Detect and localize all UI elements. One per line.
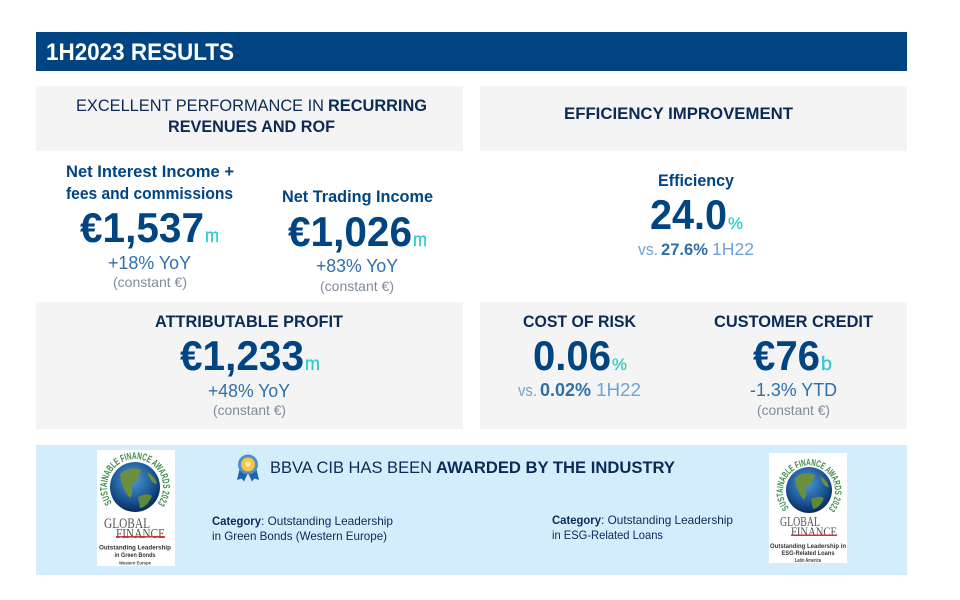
metric: efficiency: 1H22 [712,239,754,259]
award badge: esg-related loans: Outstanding Leadership in [770,543,846,550]
metric: customer credit: (constant €) [757,402,830,418]
panel: efficiency heading: EFFICIENCY IMPROVEMENT [564,104,794,123]
category: esg-related loans [552,513,733,542]
panel: attributable profit: +48% YoY [208,381,290,401]
metric: efficiency: vs. [638,240,658,259]
award badge: green bonds: in Green Bonds [114,552,156,559]
panel: attributable profit: €1,233 [180,332,304,379]
metric: customer credit: €76 [753,332,820,379]
title bar: 1H2023 RESULTS [46,39,234,66]
metric: net interest income: +18% YoY [108,253,191,273]
metric: cost of risk: 1H22 [596,379,641,400]
awards heading: BBVA CIB HAS BEEN [270,458,432,477]
category: green bonds: : Outstanding Leadership [261,514,393,528]
panel: attributable profit: m [305,354,320,375]
category: green bonds: Category [212,514,261,528]
panel: recurring revenues heading: RECURRING [328,96,427,115]
panel: recurring revenues heading: REVENUES AND ROF [168,117,335,136]
award badge: esg-related loans: GLOBAL [780,515,820,530]
metric: net trading income: Net Trading Income [282,187,433,206]
metric: net trading income: +83% YoY [316,256,398,276]
metric: net trading income: m [413,230,427,251]
metric: customer credit [714,312,874,418]
panel: attributable profit [36,302,463,429]
panel: cost of risk and customer credit [480,302,907,429]
metric: cost of risk: COST OF RISK [523,312,637,331]
metric: net interest income: Net Interest Income + [66,162,234,181]
category: esg-related loans: Category [552,513,601,527]
metric: efficiency: % [728,214,743,233]
metric: cost of risk: % [612,355,627,374]
metric: net interest income: fees and commissions [66,184,233,203]
award badge: esg-related loans: SUSTAINABLE FINANCE AWARDS 2023 [776,458,842,512]
metric: cost of risk: 0.02% [540,380,591,400]
title bar [36,32,907,71]
category: esg-related loans: in ESG-Related Loans [552,528,663,542]
award badge: esg-related loans: FINANCE [791,524,837,539]
metric: net interest income: (constant €) [113,274,187,290]
award badge: green bonds [97,450,175,566]
metric: cost of risk: vs. [518,381,537,400]
metric: efficiency: 27.6% [661,240,708,259]
award badge: green bonds: Outstanding Leadership [99,544,171,552]
metric: net interest income: m [205,226,219,247]
metric: net interest income [66,162,234,290]
metric: efficiency: Efficiency [658,171,735,190]
metric: efficiency [638,171,754,259]
awards heading: AWARDED BY THE INDUSTRY [436,458,676,477]
panel: recurring revenues heading [36,86,463,151]
category: green bonds: in Green Bonds (Western Europe) [212,529,387,543]
award badge: esg-related loans [769,453,847,564]
icon: award rosette [237,454,259,482]
metric: net trading income: (constant €) [320,278,394,294]
category: esg-related loans: : Outstanding Leadership [601,513,733,527]
metric: net trading income: €1,026 [288,208,412,255]
panel: industry awards [36,445,907,575]
metric: cost of risk [518,312,641,400]
award badge: green bonds: GLOBAL [104,516,150,532]
panel: efficiency heading [480,86,907,151]
award badge: esg-related loans: Latin America [795,558,821,564]
metric: customer credit: b [821,354,832,375]
award badge: green bonds: Western Europe [119,560,151,566]
category: green bonds [212,514,393,543]
metric: net interest income: €1,537 [80,204,204,251]
award badge: esg-related loans: ESG-Related Loans [782,550,835,557]
award badge: green bonds: FINANCE [116,526,165,541]
metric: efficiency: 24.0 [650,191,727,238]
panel: recurring revenues heading: EXCELLENT PERFORMANCE IN [76,96,324,115]
awards heading [270,458,676,477]
panel: attributable profit: ATTRIBUTABLE PROFIT [155,312,344,331]
metric: net trading income [282,187,433,294]
panel: attributable profit: (constant €) [213,402,286,418]
metric: cost of risk: 0.06 [533,332,611,379]
metric: customer credit: CUSTOMER CREDIT [714,312,874,331]
award badge: green bonds: SUSTAINABLE FINANCE AWARDS 2023 [100,452,170,506]
metric: customer credit: -1.3% YTD [750,380,837,400]
